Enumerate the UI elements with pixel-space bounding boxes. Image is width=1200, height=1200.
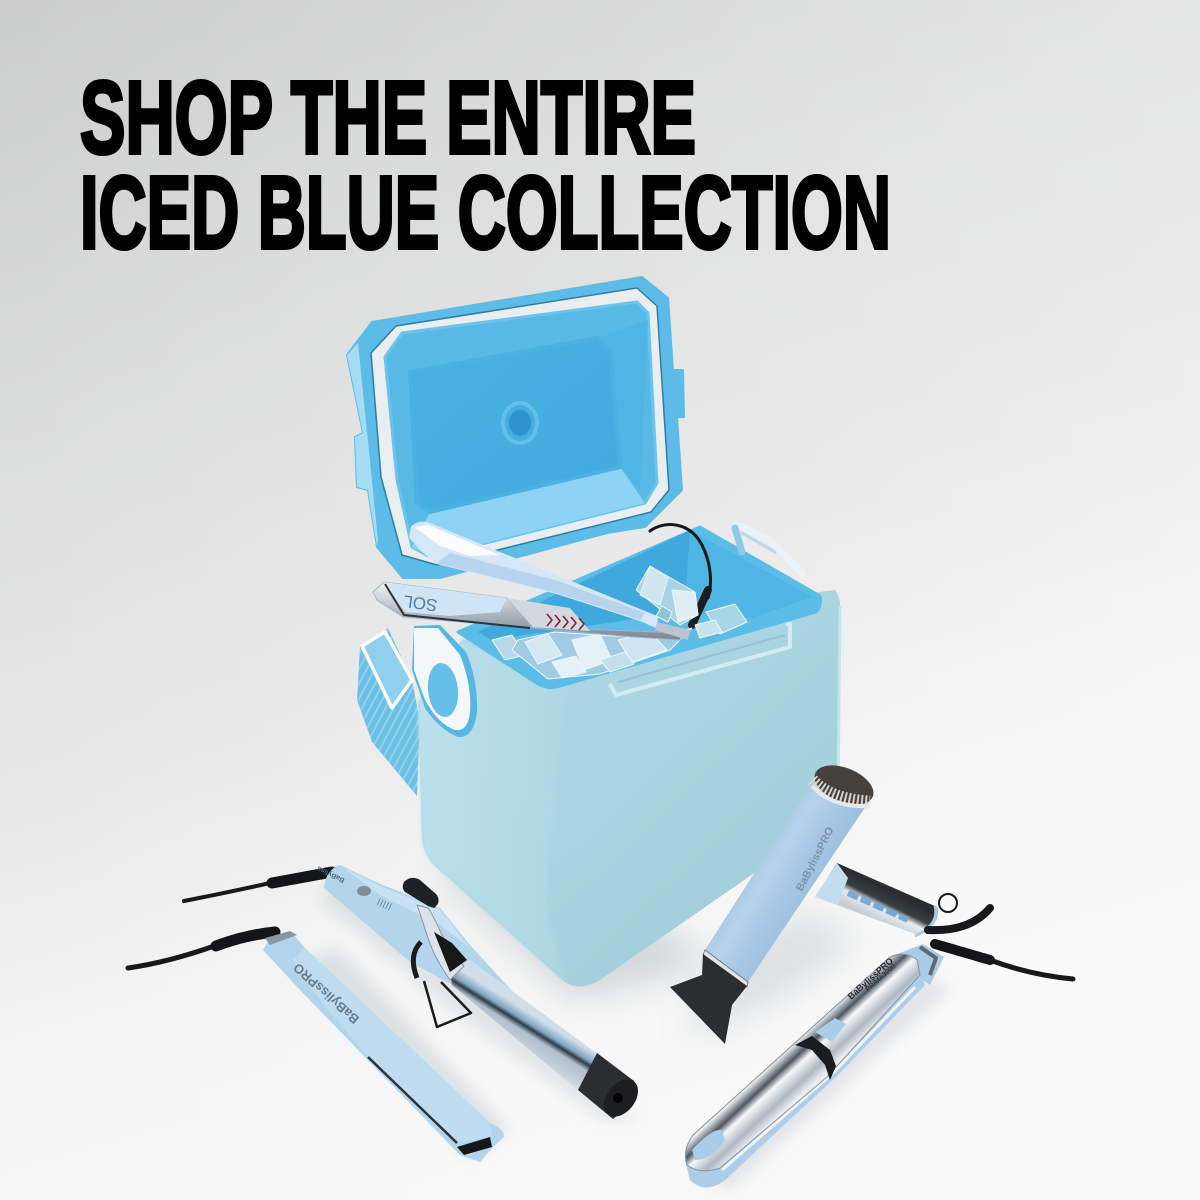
connector <box>895 944 944 985</box>
control buttons <box>848 893 908 920</box>
hair dryer: BaBylissPRO <box>794 825 837 893</box>
shadows <box>300 860 950 1190</box>
cooler body <box>418 590 840 987</box>
chrome ring <box>703 950 748 987</box>
right handle <box>735 525 803 574</box>
lower plate <box>373 582 683 640</box>
chevrons <box>547 614 584 630</box>
chrome flat iron <box>685 944 944 1188</box>
barrel <box>451 960 603 1092</box>
cord <box>928 908 990 930</box>
cooler lid <box>347 277 684 578</box>
handle <box>815 863 938 935</box>
hinge cap <box>412 625 477 737</box>
brand text: BaBylissPRO <box>846 956 895 1001</box>
cord: curling iron <box>184 872 332 901</box>
brand text: BaBylissPRO <box>290 960 362 1027</box>
tip <box>578 1053 635 1119</box>
head ring <box>809 758 879 812</box>
chrome flat iron: PRIMA3000 <box>865 963 897 993</box>
lid inner tray <box>385 302 657 557</box>
cord: flat iron <box>128 932 275 968</box>
blue base <box>685 965 925 1188</box>
chrome top <box>685 954 920 1171</box>
text on plate: SOL <box>402 591 439 615</box>
upper paddle <box>410 523 657 627</box>
cord: flat iron 2 <box>935 944 1073 979</box>
hair dryer <box>670 758 990 1044</box>
power cord in cooler <box>650 525 710 625</box>
lid gasket <box>371 288 669 565</box>
thumb rest <box>403 878 439 908</box>
title: SHOP THE ENTIRE <box>80 60 696 175</box>
handle <box>324 865 515 1010</box>
clamp lever <box>417 905 464 980</box>
body <box>705 783 870 982</box>
lid vent <box>501 401 539 445</box>
dial marks: ||||| <box>376 897 394 912</box>
logo badge <box>357 886 371 896</box>
stand <box>424 981 471 1027</box>
blue buttons <box>815 1018 846 1042</box>
cooler rim and interior <box>458 527 820 688</box>
lid floor <box>410 338 620 512</box>
ice cubes <box>492 566 747 679</box>
black band <box>795 1036 836 1080</box>
nozzle <box>670 954 747 1044</box>
flat iron <box>263 931 504 1162</box>
title <box>80 60 891 270</box>
logo text: BaByliss <box>316 864 346 883</box>
cooler strap <box>357 628 420 796</box>
straightener in cooler <box>373 523 690 640</box>
curling iron <box>316 864 645 1123</box>
